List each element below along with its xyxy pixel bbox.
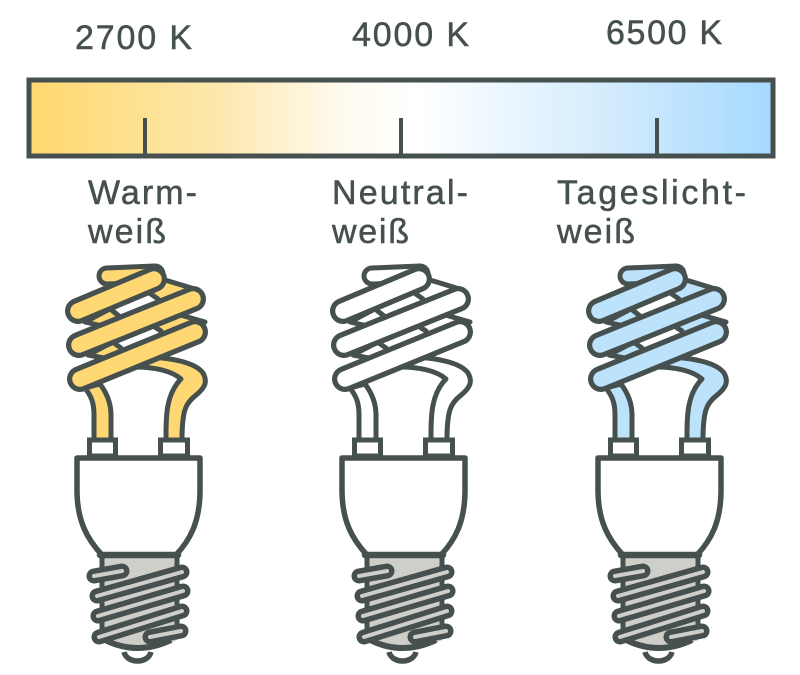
label: 6500 K: 6500 K xyxy=(606,14,722,52)
icon: daylight white bulb xyxy=(598,274,726,661)
label: 2700 K: 2700 K xyxy=(75,19,192,57)
label: 4000 K: 4000 K xyxy=(352,16,469,54)
colour temperature scale bar xyxy=(29,80,773,156)
label: Neutralweiß xyxy=(331,174,468,251)
label: Warmweiß: weiß xyxy=(87,213,166,251)
label: Warmweiß: Warm- xyxy=(88,174,197,212)
label: Neutralweiß: Neutral- xyxy=(332,174,468,212)
label: Neutralweiß: weiß xyxy=(331,213,409,251)
label: Tageslichtweiß: weiß xyxy=(556,213,635,251)
label: Warmweiß xyxy=(87,174,197,251)
icon: neutral white bulb xyxy=(342,274,470,661)
icon: warm white bulb xyxy=(77,274,205,661)
label: Tageslichtweiß: Tageslicht- xyxy=(557,174,746,212)
label: Tageslichtweiß xyxy=(556,174,746,251)
